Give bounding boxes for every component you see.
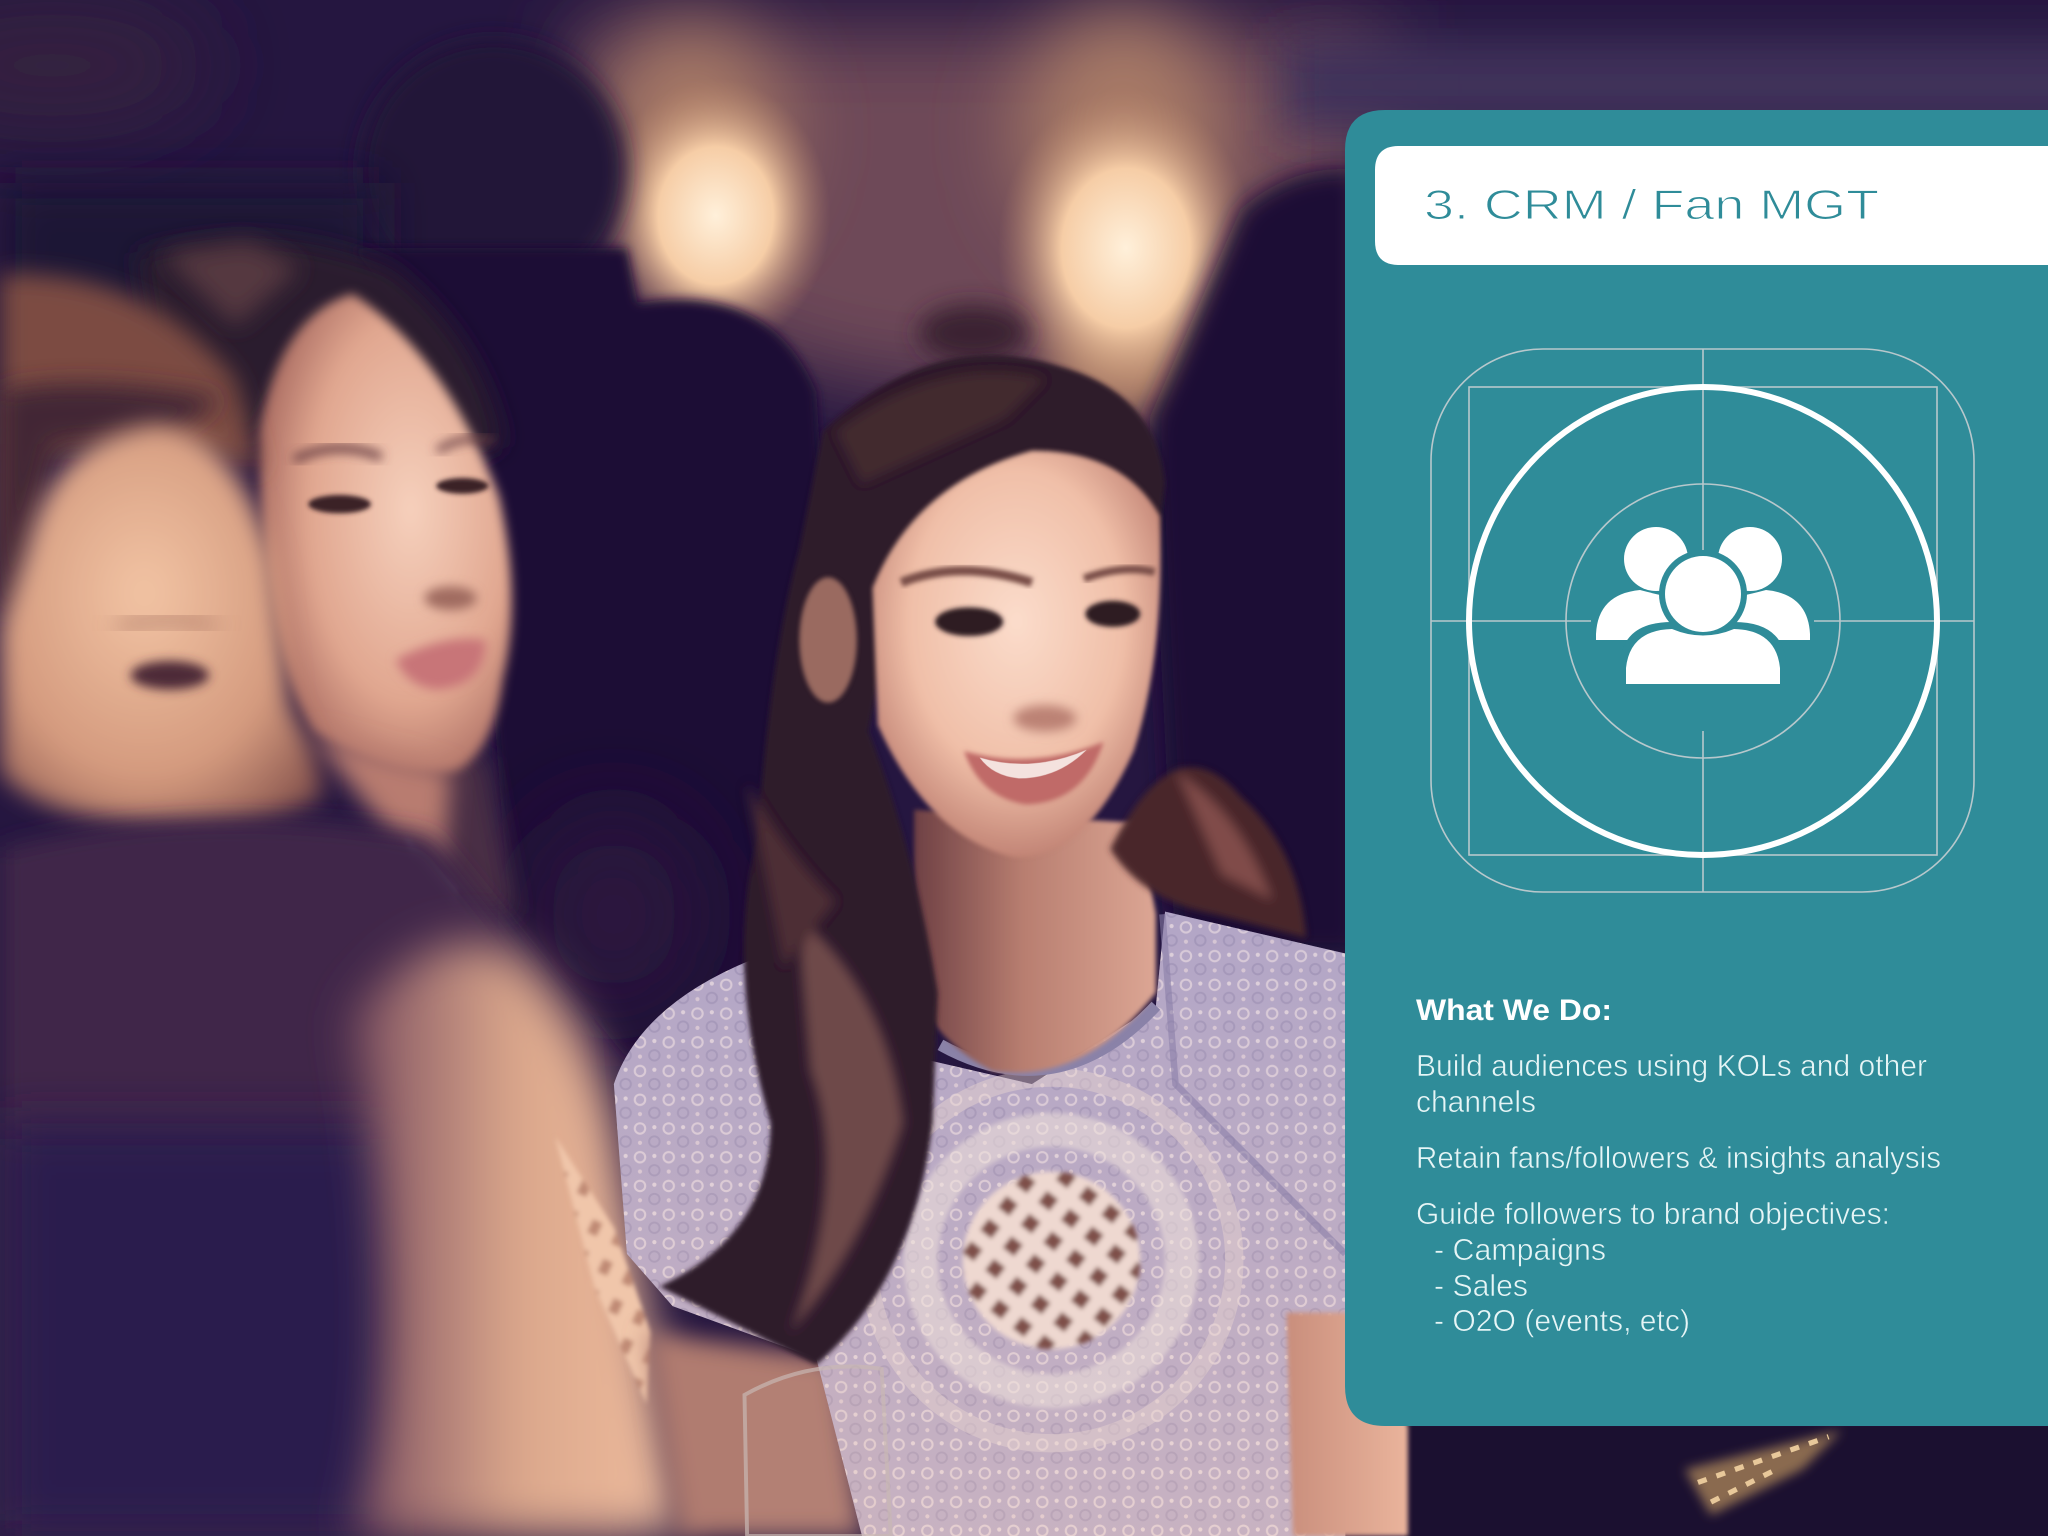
main woman: dress: [614, 912, 1345, 1536]
glass: [744, 1366, 891, 1536]
bullet: guide followers: Guide followers to brand objectives:: [1416, 1196, 1890, 1231]
bullet: guide followers: - O2O (events, etc): [1434, 1303, 1690, 1338]
subheading: What We Do:: [1416, 994, 1612, 1027]
icon: group of people: [1596, 527, 1810, 690]
text block: what we do: [1416, 994, 1941, 1338]
icon: app grid with audience symbol: [1431, 349, 1974, 892]
foreground blurred shoulder and dark dress: [0, 819, 686, 1536]
woman on the left, foreground blur: [0, 274, 321, 826]
heading bar: [1375, 146, 2048, 265]
bullet: build audiences: [1416, 1048, 1927, 1119]
bullet: build audiences: Build audiences using KOLs and other: [1416, 1048, 1927, 1083]
icon outer white ring: [1469, 387, 1937, 855]
main woman: hair: [660, 355, 1306, 1365]
icon construction grid: [1431, 349, 1974, 892]
lower arm of foreground figure behind the glass: [647, 1332, 862, 1536]
woman in the middle, out of focus: [137, 238, 516, 914]
bullet: retain fans: Retain fans/followers & insights analysis: [1416, 1140, 1941, 1175]
main woman: neck and chest: [914, 810, 1156, 1073]
background wall and lamps: [0, 0, 2048, 418]
bullet: build audiences: channels: [1416, 1084, 1536, 1119]
bullet: guide followers: - Campaigns: [1434, 1232, 1606, 1267]
heading text: 3. CRM / Fan MGT: [1424, 181, 1879, 228]
bullet: guide followers: [1416, 1196, 1890, 1338]
main woman: face: [799, 451, 1161, 857]
bullet: guide followers: - Sales: [1434, 1268, 1528, 1303]
background silhouettes: [0, 39, 1358, 1058]
main woman: arm and lower right background: [1287, 1313, 2048, 1536]
